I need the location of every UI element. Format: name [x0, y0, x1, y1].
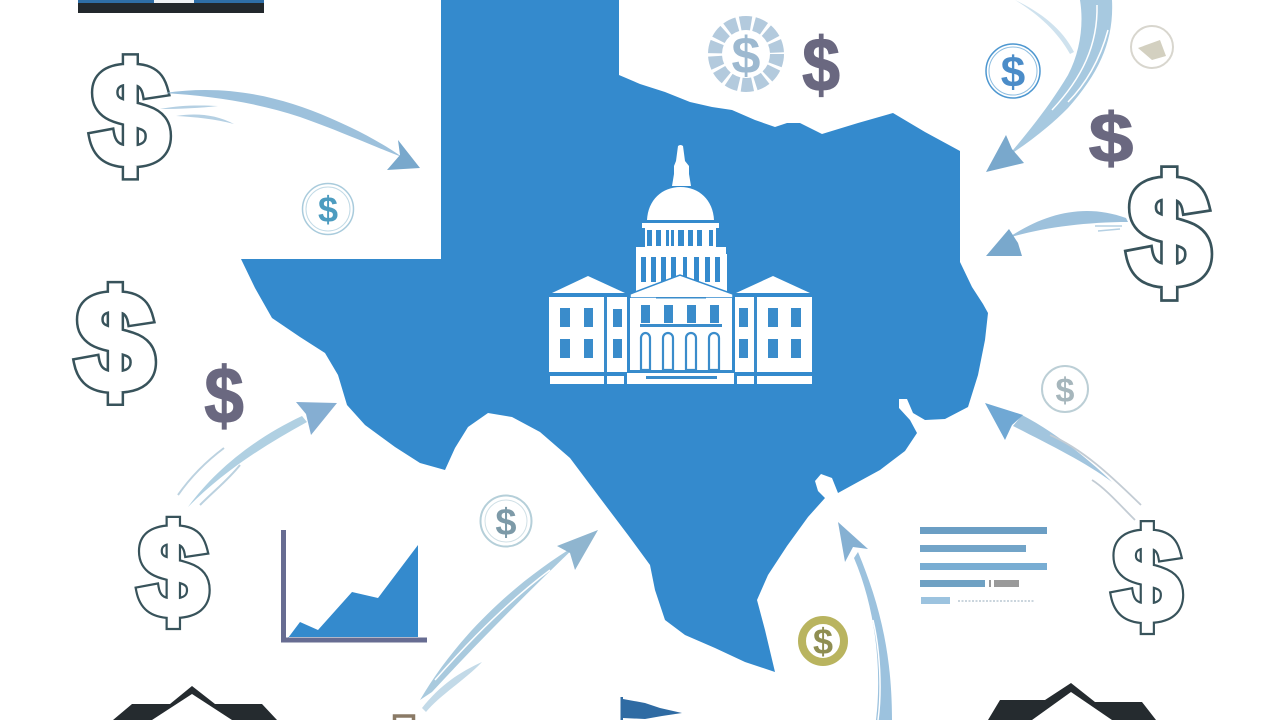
icon: gold coin: $: [813, 621, 833, 662]
icon: outlined dollar lower right: $: [1112, 505, 1182, 650]
icon: pale coin top right: [1131, 26, 1173, 68]
icon: outlined dollar mid left: $: [76, 262, 154, 420]
icon: outlined dollar top left: $: [91, 36, 169, 196]
icon: house roof bottom right: [988, 683, 1156, 720]
arrow: lower right to state: [985, 403, 1141, 520]
capitol dome: [647, 187, 714, 220]
capitol base: [550, 373, 812, 384]
icon: capitol building: [549, 145, 812, 384]
map: Texas state silhouette: [241, 0, 988, 672]
capitol central block: [630, 298, 732, 372]
icon: coin lower centre: $: [495, 502, 517, 544]
capitol left wing pediment: [552, 276, 625, 293]
capitol upper drum: [636, 223, 727, 292]
capitol right wing pediment: [736, 276, 810, 293]
icon: pale coin lower right: $: [1056, 372, 1075, 410]
icon: outlined dollar lower left: $: [138, 500, 208, 644]
icon: coin left: [302, 184, 354, 234]
icon: outlined dollar mid left: $: [76, 262, 154, 420]
icon: house roof bottom left: [113, 686, 277, 720]
capitol windows: [560, 297, 801, 379]
arrow: lower left to state: [178, 402, 337, 507]
icon: outlined dollar upper right: $: [1128, 145, 1210, 318]
icon: pale coin lower right: [1042, 366, 1088, 412]
capitol central pediment: [630, 275, 733, 298]
bar: top-left cropped banner: [78, 0, 264, 13]
icon: outlined dollar top left: $: [91, 36, 169, 196]
icon: outlined dollar lower left: $: [138, 500, 208, 644]
chart area: [288, 545, 418, 638]
icon: coin left: $: [318, 189, 338, 230]
icon: outlined dollar lower right: $: [1112, 505, 1182, 650]
arrow: top right curving to state: [986, 0, 1112, 172]
icon: cropped box at bottom: [394, 716, 414, 720]
icon: grey dollar top centre: $: [802, 23, 840, 108]
icon: gold coin: [802, 620, 844, 662]
capitol wings: [549, 297, 812, 372]
arrow: bottom right to state: [838, 522, 892, 720]
icon: sunburst coin top: $: [732, 27, 761, 85]
icon: grey dollar upper right: $: [1089, 99, 1133, 177]
icon: flag: [620, 697, 682, 720]
arrow: top left to state: [160, 90, 420, 170]
icon: sunburst coin top: [715, 23, 777, 85]
list: horizontal bars: [920, 527, 1047, 604]
arrow: bottom centre to state: [420, 530, 598, 712]
icon: coin lower centre: [480, 496, 532, 546]
chart axes: [284, 530, 427, 640]
capitol finial and lantern: [672, 145, 691, 186]
icon: grey dollar left: $: [204, 351, 244, 440]
icon: blue coin top right: $: [1001, 48, 1025, 97]
arrow: right dollar to state: [986, 211, 1128, 256]
icon: outlined dollar upper right: $: [1128, 145, 1210, 318]
chart: rising area chart: [284, 530, 427, 640]
icon: blue coin top right: [986, 44, 1040, 98]
